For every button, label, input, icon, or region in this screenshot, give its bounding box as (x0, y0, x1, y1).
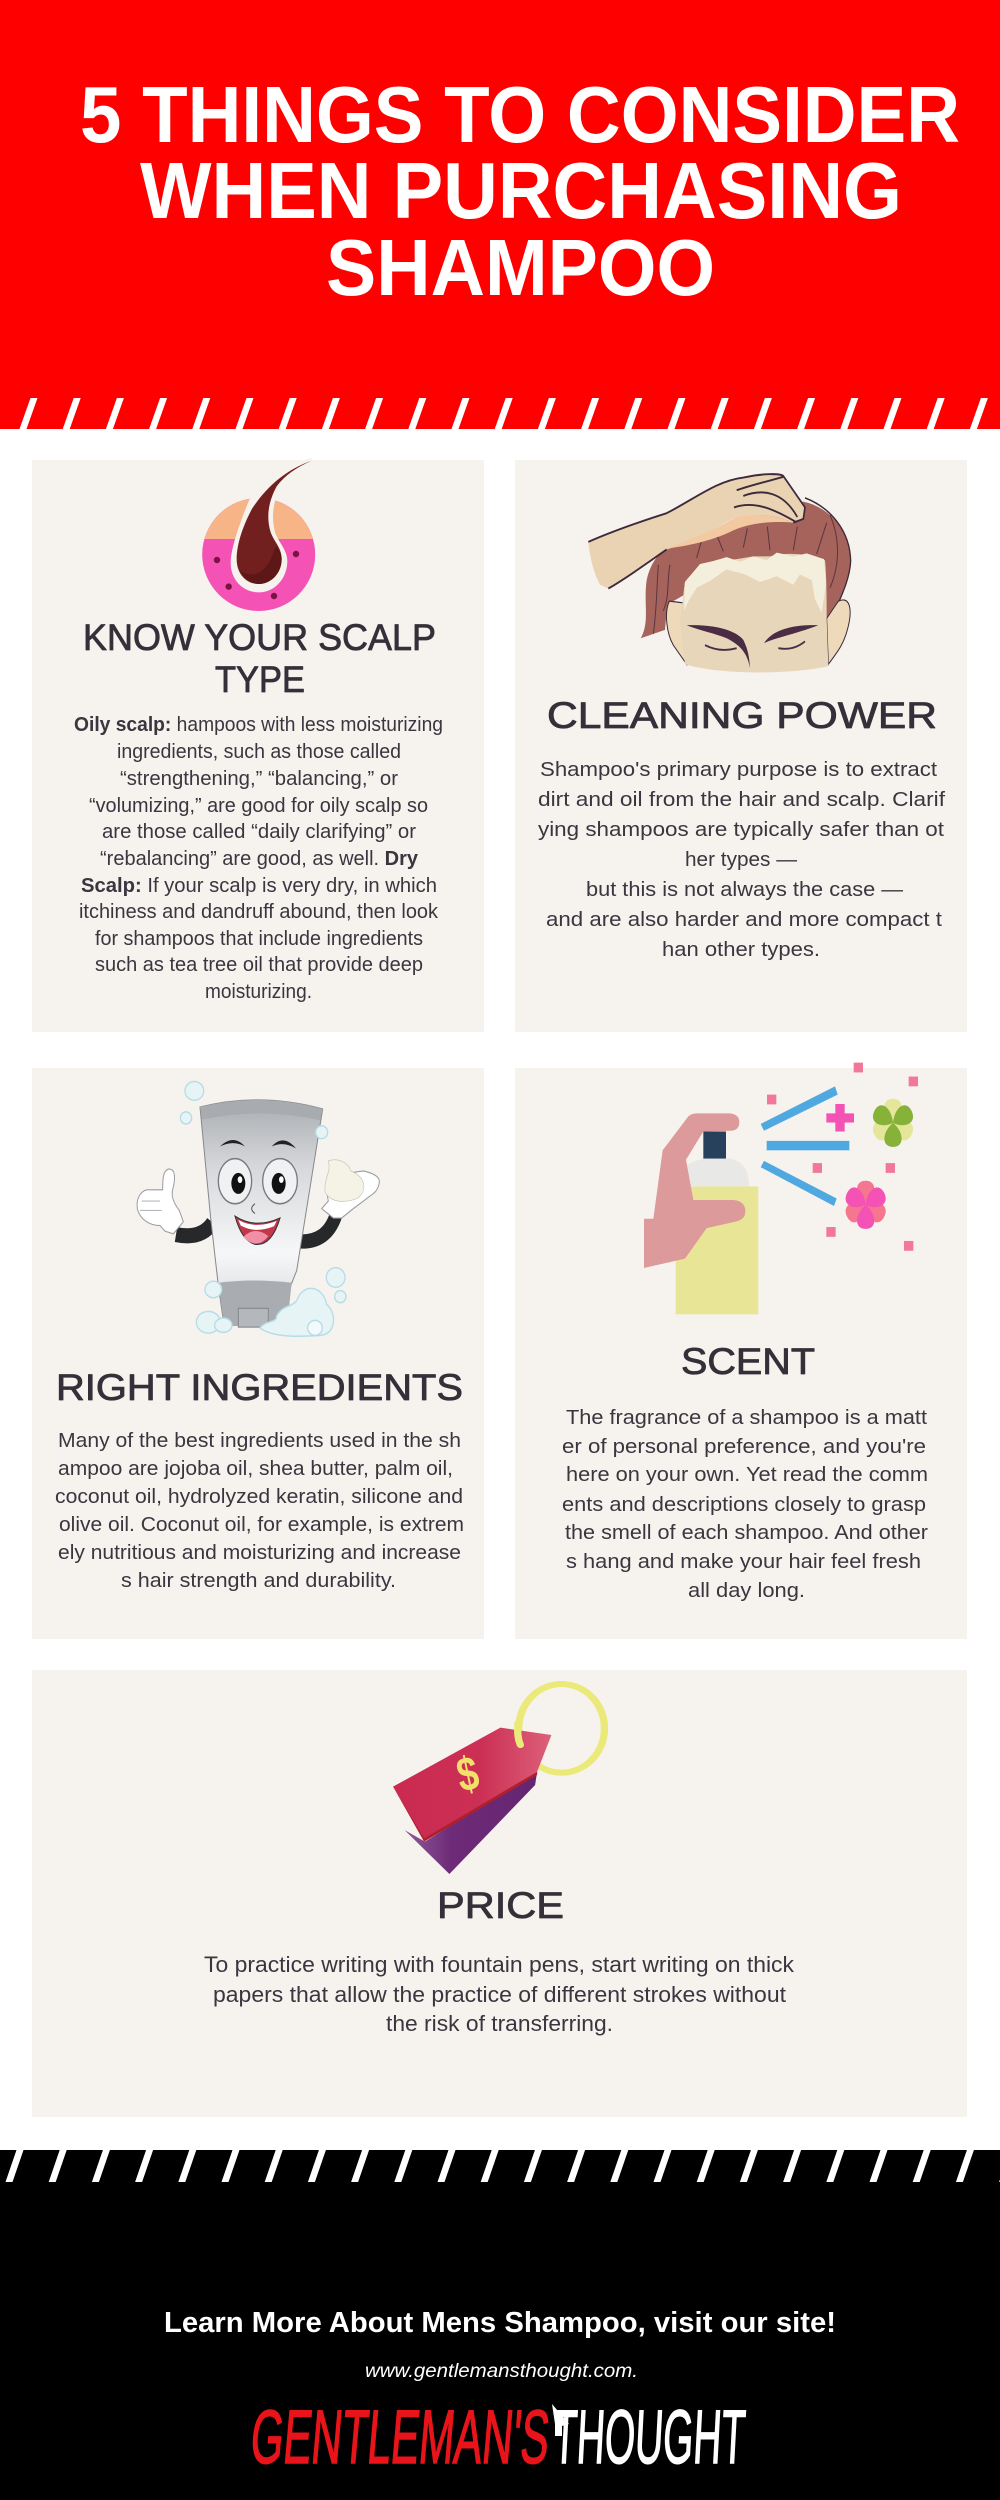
text block: cleaning power: but this is not always the case — (586, 878, 904, 901)
text block: scent: here on your own. Yet read the comm (566, 1463, 928, 1486)
text block: right ingredients (55, 1429, 464, 1592)
header banner (0, 0, 1000, 429)
text block: cleaning power (538, 758, 945, 961)
heading: know your scalp type (83, 617, 436, 700)
title (80, 70, 960, 312)
text block: right ingredients: Many of the best ingredients used in the sh (58, 1429, 461, 1452)
text block: price: papers that allow the practice of different strokes without (213, 1982, 786, 2007)
text block: scalp types: for shampoos that include ingredients (95, 927, 423, 950)
text block: scalp types: Oily scalp: hampoos with less moisturizing (74, 713, 443, 736)
text block: cleaning power: and are also harder and more compact t (546, 908, 942, 931)
text block: scent (562, 1406, 928, 1602)
panel: know your scalp type (32, 458, 484, 1032)
text block: right ingredients: ely nutritious and moisturizing and increase (58, 1541, 461, 1564)
icon: price tag (393, 1684, 604, 1874)
icon: price tag: $ (452, 1746, 484, 1803)
icon: smiling shampoo tube (137, 1081, 379, 1336)
heading: right ingredients: RIGHT INGREDIENTS (56, 1367, 463, 1408)
text block: cleaning power: han other types. (662, 938, 820, 961)
title: WHEN PURCHASING (140, 146, 902, 235)
text block: price (204, 1952, 795, 2036)
text block: cleaning power: her types — (685, 848, 797, 871)
text block: price: To practice writing with fountain pens, start writing on thick (204, 1952, 795, 1977)
icon: hand on foamy hair (588, 474, 851, 672)
text block: right ingredients: coconut oil, hydrolyzed keratin, silicone and (55, 1485, 463, 1508)
panel: right ingredients (32, 1068, 484, 1639)
text block: scalp types: are those called “daily clarifying” or (102, 820, 416, 843)
text block: cleaning power: ying shampoos are typically safer than ot (538, 818, 944, 841)
title: SHAMPOO (326, 223, 715, 312)
text block: scent: ents and descriptions closely to grasp (562, 1493, 926, 1516)
text block: scent: all day long. (688, 1579, 805, 1602)
text block: cleaning power: Shampoo's primary purpose is to extract (540, 758, 937, 781)
text block: scent: er of personal preference, and you're (562, 1435, 926, 1458)
text block: scalp types (74, 713, 443, 1003)
heading: know your scalp type: TYPE (215, 659, 305, 700)
text block: scalp types: such as tea tree oil that provide deep (95, 953, 423, 976)
text block: scent: s hang and make your hair feel fresh (566, 1550, 921, 1573)
text block: scalp types: “strengthening,” “balancing,” or (120, 767, 398, 790)
heading: know your scalp type: KNOW YOUR SCALP (83, 617, 436, 658)
text block: scalp types: Scalp: If your scalp is very dry, in which (81, 874, 437, 897)
heading: scent: SCENT (681, 1341, 815, 1382)
text block: scalp types: itchiness and dandruff abound, then look (79, 900, 439, 923)
icon: hair follicle (202, 458, 315, 611)
text block: right ingredients: olive oil. Coconut oil, for example, is extrem (59, 1513, 464, 1536)
icon: perfume spray (644, 1063, 918, 1314)
panel: scent (515, 1063, 967, 1639)
logo: gentleman's thought: GENTLEMAN'S (248, 2395, 553, 2480)
text block: price: the risk of transferring. (386, 2011, 613, 2036)
text block: scalp types: “volumizing,” are good for oily scalp so (89, 794, 428, 817)
panel: price (32, 1670, 967, 2117)
text block: scent: the smell of each shampoo. And other (565, 1521, 928, 1544)
text block: cleaning power: dirt and oil from the hair and scalp. Clarif (538, 788, 945, 811)
text block: scalp types: “rebalancing” are good, as well. Dry (100, 847, 419, 870)
logo: gentleman's thought: THOUGHT (551, 2395, 748, 2480)
panel: cleaning power (515, 460, 967, 1032)
footer (0, 2150, 1000, 2500)
text block: right ingredients: ampoo are jojoba oil, shea butter, palm oil, (58, 1457, 453, 1480)
heading: cleaning power: CLEANING POWER (547, 695, 937, 736)
text block: right ingredients: s hair strength and durability. (121, 1569, 396, 1592)
heading: price: PRICE (437, 1885, 564, 1926)
call to action: Learn More About Mens Shampoo, visit our site! (164, 2307, 836, 2339)
title: 5 THINGS TO CONSIDER (80, 70, 960, 159)
text block: scent: The fragrance of a shampoo is a matt (566, 1406, 927, 1429)
text block: scalp types: moisturizing. (205, 980, 312, 1003)
website url: www.gentlemansthought.com. (365, 2361, 638, 2382)
text block: scalp types: ingredients, such as those called (117, 740, 401, 763)
